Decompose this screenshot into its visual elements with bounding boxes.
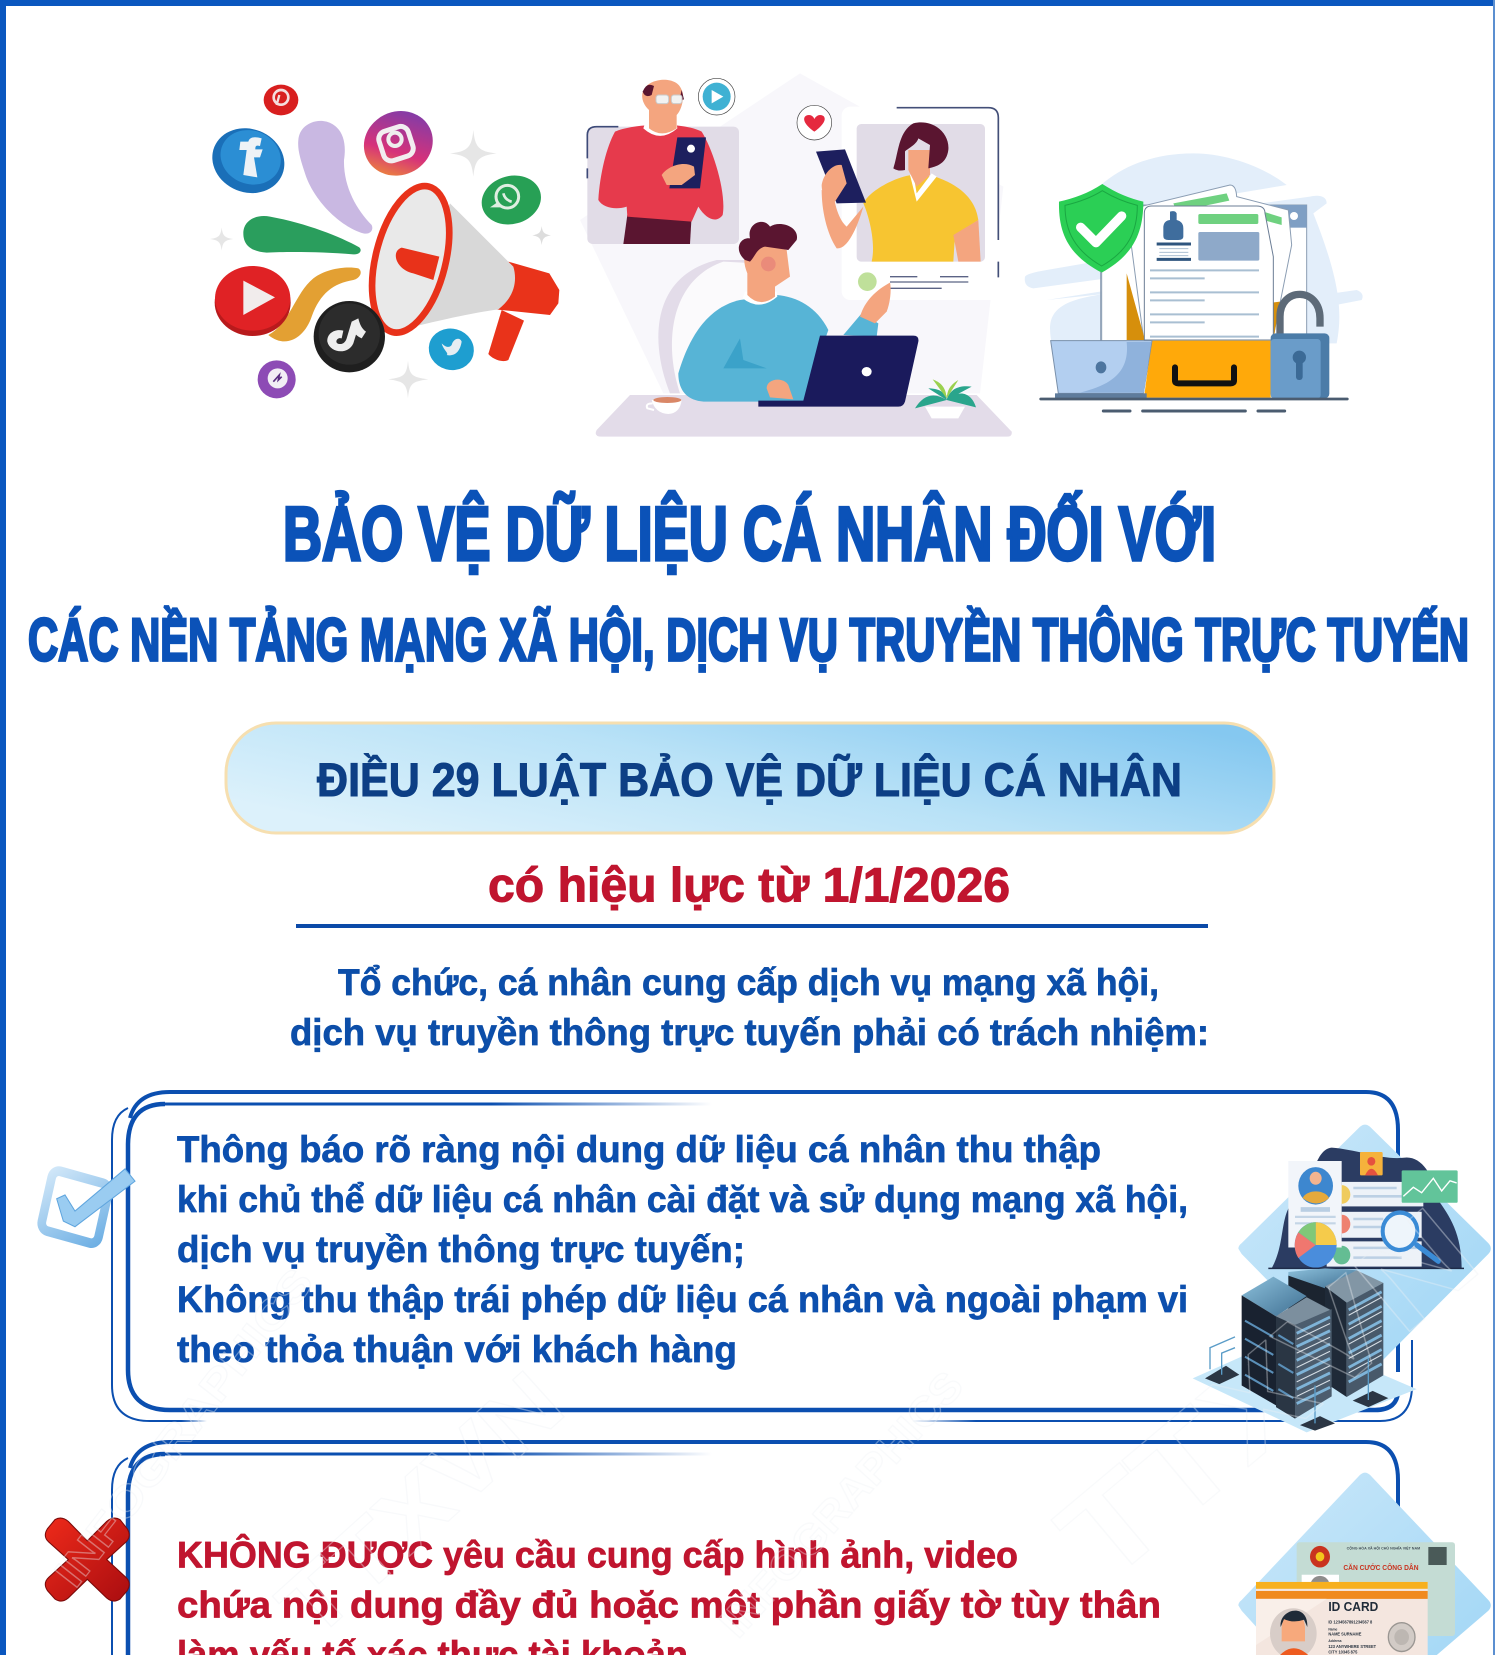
hand [767,380,793,399]
citizen card: CỘNG HÒA XÃ HỘI CHỦ NGHĨA VIỆT NAM [1347,1545,1420,1551]
illustration: secure documents [1025,153,1363,411]
intro text: Tổ chức, cá nhân cung cấp dịch vụ mạng xã hội, [338,962,1159,1003]
icon: whatsapp [476,169,547,231]
id card: CITY 10345 875 [1328,1650,1358,1655]
man head [642,80,683,133]
responsibilities text: Không thu thập trái phép dữ liệu cá nhân và ngoài phạm vi [177,1279,1188,1320]
server racks [1242,1268,1383,1419]
citizen card [1297,1542,1455,1636]
responsibilities text: dịch vụ truyền thông trực tuyến; [177,1229,745,1270]
green chart [1402,1170,1458,1203]
icon: youtube [215,266,291,336]
padlock [1271,294,1329,398]
back documents [1127,185,1292,337]
icon: twitter [424,324,479,375]
panel: man video call [587,80,739,244]
illustration: servers and data [1193,1125,1491,1432]
background shape [580,73,1003,393]
laptop [758,336,918,407]
desk [596,395,1012,437]
prohibition text [177,1534,1161,1655]
panel: woman video call [816,107,998,300]
watermark: INFOGRAPHICS [710,1362,972,1646]
responsibilities text: khi chủ thể dữ liệu cá nhân cài đặt và sử dụng mạng xã hội, [177,1179,1188,1220]
pie chart [1295,1222,1337,1268]
icon: blue check box [40,1169,135,1245]
drawer [1144,341,1271,398]
shape: small sparkle left [210,227,233,251]
heading pill: Điều 29: ĐIỀU 29 LUẬT BẢO VỆ DỮ LIỆU CÁ NHÂN [317,753,1182,806]
id card: Name [1328,1627,1337,1632]
icon: red cross [45,1518,129,1601]
browser window [1102,205,1307,345]
icon: messenger [258,360,296,398]
shape: purple swoosh [298,121,372,234]
illustration: people on online platforms [580,73,1012,437]
front document [1144,206,1273,340]
woman [863,175,978,262]
illustration: social media megaphone [202,85,559,398]
watermark: TTXVN [259,1353,583,1655]
watermark: TTXVN [1033,1182,1495,1608]
illustration: megaphone [359,178,559,361]
profile card [1288,1161,1342,1247]
intro text [290,962,1209,1053]
effective date: có hiệu lực từ 1/1/2026 [488,860,1010,912]
intro text: dịch vụ truyền thông trực tuyến phải có trách nhiệm: [290,1012,1209,1053]
panel: responsibilities box [112,1092,1412,1421]
chair [658,260,757,393]
icon: play bubble [698,78,735,115]
panel: prohibition box [112,1442,1398,1655]
phone [669,137,706,188]
backdrop circle [1025,153,1363,343]
dark blob [1272,1148,1462,1268]
floor [1193,1335,1417,1432]
shape: sparkle bottom [388,361,428,398]
folder back [1127,273,1280,340]
id card: NAME SURNAME [1328,1631,1362,1637]
icon: green shield check [1059,184,1143,342]
id card: ID CARD [1328,1600,1378,1614]
heading pill: Điều 29 [226,723,1274,833]
diamond backdrop [1238,1473,1491,1655]
id card: ID 1234567891234567 8 [1328,1619,1373,1624]
orange badge [1360,1152,1383,1175]
id card: Address [1328,1639,1342,1643]
icon: instagram [353,100,443,187]
data cards [1327,1182,1423,1267]
watermark [45,1182,1495,1655]
icon: pinterest [264,85,298,115]
responsibilities text: Thông báo rõ ràng nội dung dữ liệu cá nhân thu thập [177,1129,1101,1170]
responsibilities text: theo thỏa thuận với khách hàng [177,1329,737,1370]
laptop [1051,341,1152,398]
prohibition text: KHÔNG ĐƯỢC yêu cầu cung cấp hình ảnh, video [177,1534,1018,1576]
shape: green swoosh [243,216,361,254]
phone [816,149,866,203]
id card [1256,1582,1428,1655]
prohibition text: chứa nội dung đầy đủ hoặc một phần giấy tờ tùy thân [177,1584,1161,1626]
plant [915,379,976,418]
icon: heart bubble [797,105,832,140]
citizen card: CĂN CƯỚC CÔNG DÂN [1343,1563,1419,1572]
icon: tiktok [314,301,385,372]
ground lines [1041,399,1347,411]
stands [1205,1366,1388,1431]
cup [647,397,682,414]
caption lines [858,272,968,291]
magnifier [1383,1213,1438,1261]
watermark: INFOGRAPHICS [45,1259,322,1596]
illustration: ID cards [1238,1473,1491,1655]
icon: facebook [202,118,294,204]
shape: small sparkle right [532,226,551,245]
shape: orange swoosh [268,267,361,341]
man torso [623,215,692,244]
diamond backdrop [1238,1125,1491,1377]
responsibilities text [177,1129,1188,1370]
shape: sparkle [450,130,497,177]
man at laptop [678,222,918,407]
id card: 123 ANYWHERE STREET [1328,1644,1377,1649]
